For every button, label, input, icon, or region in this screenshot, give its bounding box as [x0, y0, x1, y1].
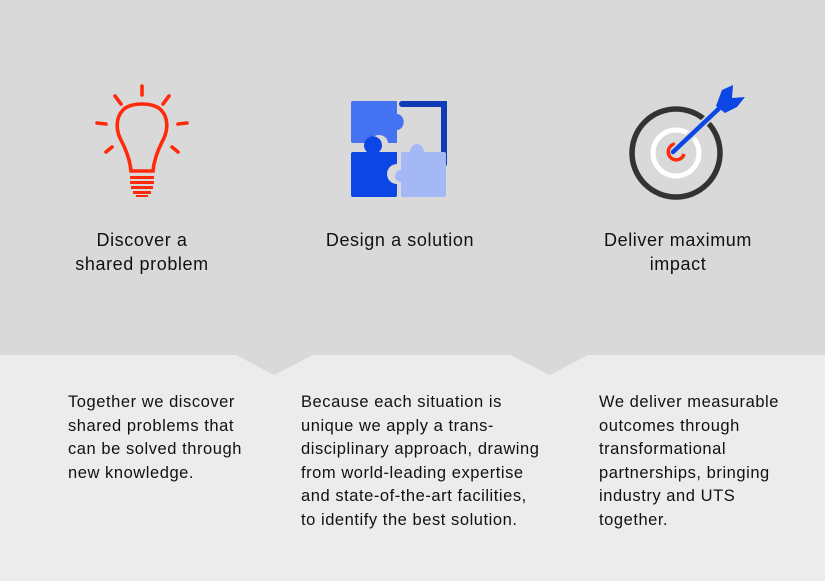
- heading: deliver: Deliver maximum: [604, 230, 752, 250]
- text: deliver: We deliver measurable: [599, 393, 779, 411]
- heading: discover: Discover a: [96, 230, 188, 250]
- text: discover: Together we discover: [68, 393, 235, 411]
- text: design: to identify the best solution.: [301, 511, 517, 529]
- heading: discover: shared problem: [75, 254, 209, 274]
- text: discover: shared problems that: [68, 417, 234, 435]
- text: deliver: together.: [599, 511, 668, 529]
- icon: target: [629, 85, 745, 200]
- text: discover: can be solved through: [68, 440, 242, 458]
- heading: design: Design a solution: [326, 230, 474, 250]
- text: deliver: partnerships, bringing: [599, 464, 770, 482]
- text: design: from world-leading expertise: [301, 464, 524, 482]
- heading: discover: [75, 230, 209, 274]
- text: deliver: industry and UTS: [599, 487, 735, 505]
- icon: puzzle: [351, 101, 447, 197]
- text: discover: new knowledge.: [68, 464, 194, 482]
- text: deliver: [599, 393, 779, 529]
- text: design: and state-of-the-art facilities,: [301, 487, 527, 505]
- text: design: [301, 393, 539, 529]
- text: deliver: outcomes through: [599, 417, 740, 435]
- heading: deliver: impact: [650, 254, 706, 274]
- text: deliver: transformational: [599, 440, 726, 458]
- icon: light bulb: [95, 84, 189, 197]
- text: design: Because each situation is: [301, 393, 502, 411]
- heading: deliver: [604, 230, 752, 274]
- text: discover: [68, 393, 242, 482]
- text: design: unique we apply a trans-: [301, 417, 494, 435]
- text: design: disciplinary approach, drawing: [301, 440, 539, 458]
